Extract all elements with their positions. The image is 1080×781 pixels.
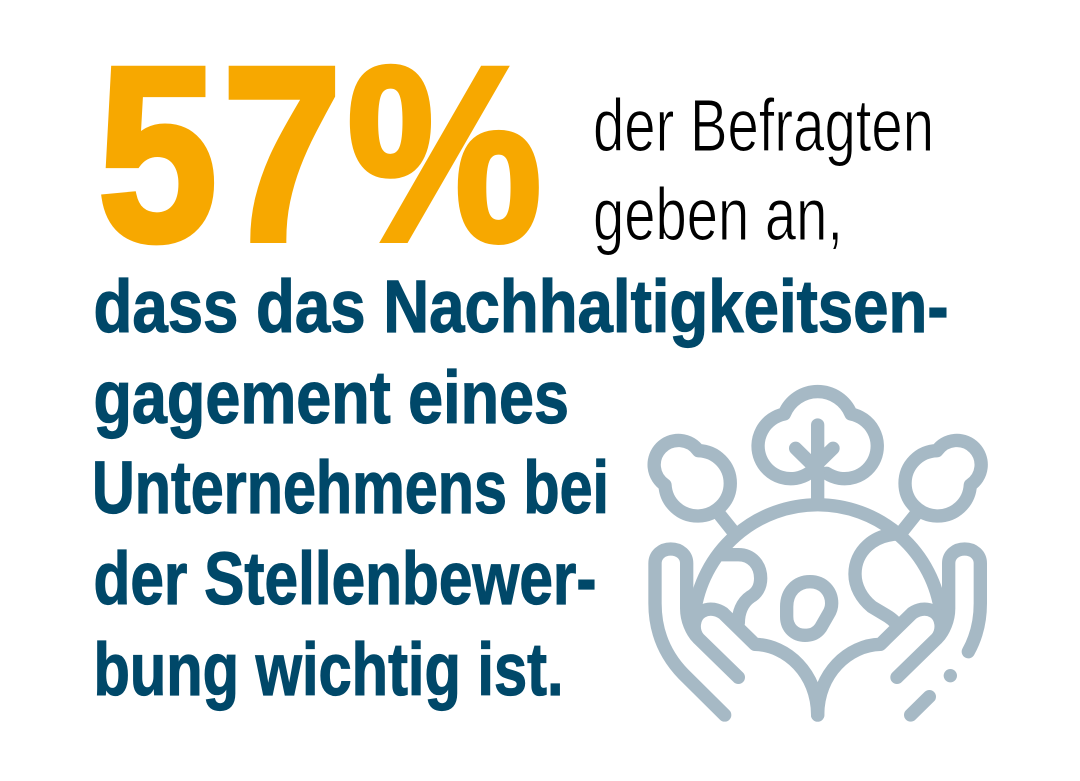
- headline statistic: 57%: %: [347, 15, 542, 293]
- icon part: left tree: [654, 440, 733, 532]
- icon part: dot: [944, 669, 957, 682]
- main statement text block: gagement eines: [94, 356, 569, 439]
- main statement text block: Unternehmens bei: [92, 446, 609, 529]
- intro text block: geben an,: [593, 173, 843, 256]
- icon part: left continent: [718, 555, 761, 623]
- icon part: right hand: [818, 549, 980, 715]
- main statement text block: der Stellenbewer-: [94, 537, 596, 620]
- icon part: right tree: [902, 440, 981, 532]
- main statement text block: bung wichtig ist.: [94, 628, 564, 711]
- headline statistic: 57%: [98, 15, 542, 293]
- main statement text block: dass das Nachhaltigkeitsen-: [94, 265, 948, 348]
- icon part: dash: [911, 697, 929, 715]
- icon part: centre island: [787, 582, 832, 635]
- icon part: centre tree: [758, 392, 877, 504]
- headline statistic: 57%: 5: [98, 15, 218, 293]
- intro text block: [593, 84, 934, 256]
- main statement text block: [92, 265, 948, 711]
- icon part: globe outline: [694, 505, 941, 613]
- icon part: right continent: [855, 534, 900, 624]
- intro text block: der Befragten: [593, 84, 934, 167]
- icon part: left hand: [655, 549, 818, 715]
- headline statistic: 57%: 7: [222, 15, 342, 293]
- icon: hands holding globe with trees: [654, 392, 981, 715]
